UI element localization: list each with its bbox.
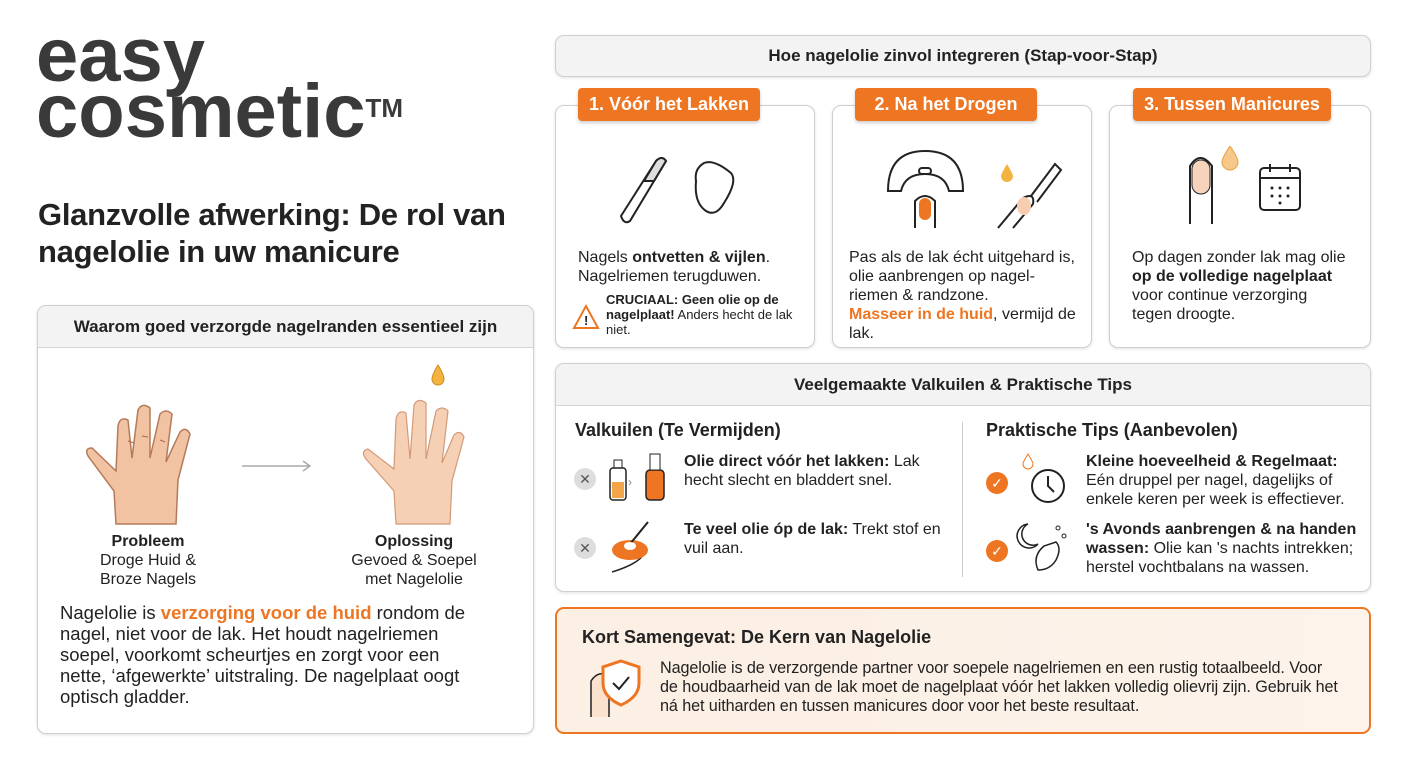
text — [578, 249, 770, 285]
text: Nagelriemen terugduwen. — [578, 268, 761, 285]
column: tips — [986, 420, 1356, 576]
panel heading — [38, 306, 533, 348]
pitfall 2 — [574, 521, 941, 573]
panel: why — [37, 305, 534, 734]
tab 3: 3. Tussen Manicures — [1144, 94, 1320, 114]
icon: nail, drop, calendar — [1189, 146, 1301, 224]
tip 1: Kleine hoeveelheid & Regelmaat: Eén druppel per nagel, dagelijks of enkele keren per week is effectiever. — [1086, 453, 1345, 508]
title: Glanzvolle afwerking: De rol van — [38, 197, 506, 232]
text — [849, 249, 1076, 342]
label: solution: Oplossing — [375, 533, 453, 550]
tip 1: ✓ — [991, 475, 1003, 491]
text: riemen & randzone. — [849, 287, 989, 304]
text: voor continue verzorging — [1132, 287, 1307, 304]
pitfall 1: › — [628, 475, 632, 489]
text — [1132, 249, 1345, 323]
panel heading: Waarom goed verzorgde nagelranden essentieel zijn — [74, 317, 497, 336]
text: Pas als de lak écht uitgehard is, — [849, 249, 1075, 266]
pitfall 2: Te veel olie óp de lak: Trekt stof en vuil aan. — [684, 521, 941, 557]
tip 2: 's Avonds aanbrengen & na handen wassen: Olie kan 's nachts intrekken; herstel vochtbalans na wassen. — [1086, 521, 1356, 576]
label: problem: Droge Huid & — [100, 552, 196, 569]
card 2 — [832, 105, 1092, 348]
text: op de volledige nagelplaat — [1132, 268, 1332, 285]
tab 3 — [1133, 88, 1331, 121]
pitfall 1: ✕ — [579, 471, 591, 487]
label: solution — [351, 533, 477, 588]
summary box — [555, 607, 1371, 734]
illustration: dry hand — [86, 404, 191, 525]
pitfall 1: Olie direct vóór het lakken: Lak hecht slecht en bladdert snel. — [684, 453, 920, 489]
column: pitfalls: Valkuilen (Te Vermijden) — [575, 420, 781, 440]
logo — [36, 13, 403, 154]
card 3 — [1109, 105, 1371, 348]
card 1: ! — [584, 313, 588, 328]
panel: pitfalls and tips — [555, 363, 1371, 592]
card 1 — [555, 105, 815, 348]
icon: file and buffer — [620, 157, 734, 224]
steps header: Hoe nagelolie zinvol integreren (Stap-voor-Stap) — [768, 46, 1158, 65]
label: problem — [100, 533, 196, 588]
title: nagelolie in uw manicure — [38, 234, 399, 269]
summary text: de houdbaarheid van de lak moet de nagelplaat vóór het lakken volledig olievrij zijn. Gebruik het — [660, 678, 1338, 696]
text: Op dagen zonder lak mag olie — [1132, 249, 1345, 266]
pitfall 2: ✕ — [579, 540, 591, 556]
icon: lamp and brush — [887, 150, 1062, 229]
tip 2: ✓ — [991, 543, 1003, 559]
text: Nagels ontvetten & vijlen. — [578, 249, 770, 266]
column: tips: Praktische Tips (Aanbevolen) — [986, 420, 1238, 440]
panel heading: Veelgemaakte Valkuilen & Praktische Tips — [794, 375, 1132, 394]
summary heading: Kort Samengevat: De Kern van Nagelolie — [582, 627, 931, 647]
pitfall 1 — [574, 453, 920, 501]
panel heading — [556, 364, 1370, 406]
tab 1: 1. Vóór het Lakken — [589, 94, 749, 114]
column: pitfalls — [574, 420, 941, 573]
divider — [962, 422, 963, 577]
tab 1 — [578, 88, 760, 121]
steps header — [555, 35, 1371, 77]
paragraph: Nagelolie is verzorging voor de huid rondom de nagel, niet voor de lak. Het houdt nagelriemen soepel, voorkomt scheurtjes en zorgt voor een nette, ‘afgewerkte’ uitstraling. De nagelplaat oogt optisch gladder. — [60, 602, 465, 707]
summary text: ná het uitharden en tussen manicures door voor het beste resultaat. — [660, 697, 1139, 715]
logo: cosmeticTM — [36, 69, 403, 154]
icon: shield finger — [590, 659, 640, 717]
title — [38, 197, 506, 269]
arrow — [242, 460, 312, 472]
tab 2 — [855, 88, 1037, 121]
summary text — [660, 659, 1338, 715]
text: olie aanbrengen op nagel- — [849, 268, 1035, 285]
label: solution: Gevoed & Soepel — [351, 552, 477, 569]
warning — [572, 292, 792, 337]
illustration: healthy hand with drop — [362, 364, 465, 525]
text: Masseer in de huid, vermijd de lak. — [849, 306, 1076, 342]
tab 2: 2. Na het Drogen — [874, 94, 1018, 114]
logo: easy — [36, 13, 205, 98]
text: tegen droogte. — [1132, 306, 1235, 323]
label: problem: Broze Nagels — [100, 571, 196, 588]
label: problem: Probleem — [112, 533, 184, 550]
summary text: Nagelolie is de verzorgende partner voor soepele nagelriemen en een rustig totaalbeeld. Voor — [660, 659, 1322, 677]
label: solution: met Nagelolie — [365, 571, 463, 588]
card 1: CRUCIAAL: Geen olie op de nagelplaat! Anders hecht de lak niet. — [606, 292, 792, 337]
